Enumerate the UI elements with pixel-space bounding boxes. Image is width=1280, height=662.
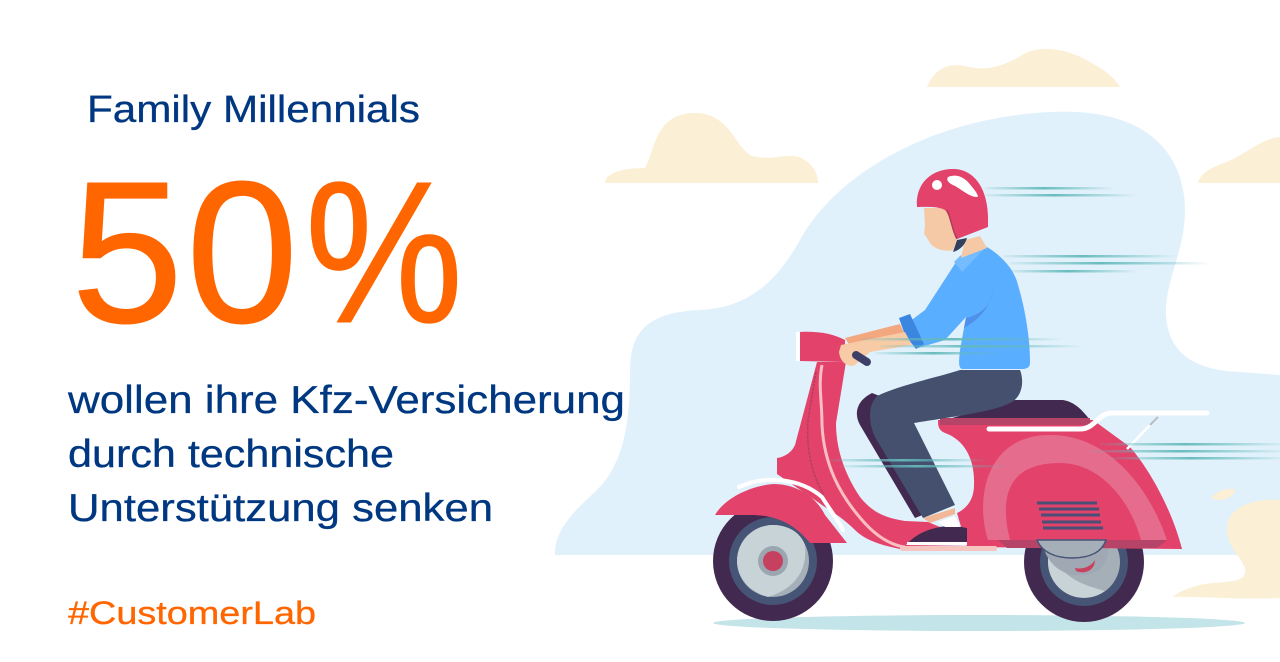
front fender	[715, 484, 847, 543]
neck	[961, 236, 987, 258]
scooter and rider illustration	[713, 169, 1207, 622]
body text: Unterstützung senken	[68, 487, 493, 530]
hashtag: #CustomerLab	[68, 595, 316, 631]
background blob	[555, 112, 1280, 555]
upper arm far	[845, 324, 905, 346]
grip	[856, 355, 867, 362]
front wheel	[713, 501, 833, 621]
helmet	[917, 169, 988, 239]
floor strip	[900, 546, 997, 551]
speed lines	[830, 187, 1280, 468]
handlebar	[800, 332, 845, 362]
shirt	[905, 247, 1030, 369]
big number: 50%: 0	[186, 139, 298, 365]
rear body	[938, 420, 1182, 549]
body text	[67, 379, 625, 530]
clouds	[605, 49, 1280, 599]
body text: wollen ihre Kfz-Versicherung	[67, 379, 625, 422]
helmet highlights	[932, 180, 942, 190]
shield trim	[820, 365, 905, 547]
rear wheel	[1024, 502, 1144, 622]
dark leg	[857, 393, 935, 518]
shoe	[908, 525, 967, 543]
pants	[870, 370, 1022, 518]
side panel	[983, 435, 1167, 540]
vents	[1037, 503, 1103, 528]
engine underside	[998, 540, 1167, 548]
seat	[945, 400, 1090, 420]
face	[924, 208, 957, 251]
cuff	[899, 314, 924, 349]
forearm and hand	[839, 332, 912, 366]
big number: 50%: 5	[71, 139, 183, 365]
ground shadow	[713, 615, 1245, 631]
leg shield and floorboard	[777, 362, 970, 549]
big number: 50%: %	[305, 139, 463, 365]
rack	[989, 413, 1207, 429]
sock	[923, 508, 955, 523]
body text: durch technische	[68, 433, 394, 476]
heading: Family Millennials: Family Millennials	[87, 89, 420, 131]
seat band	[940, 418, 1090, 425]
